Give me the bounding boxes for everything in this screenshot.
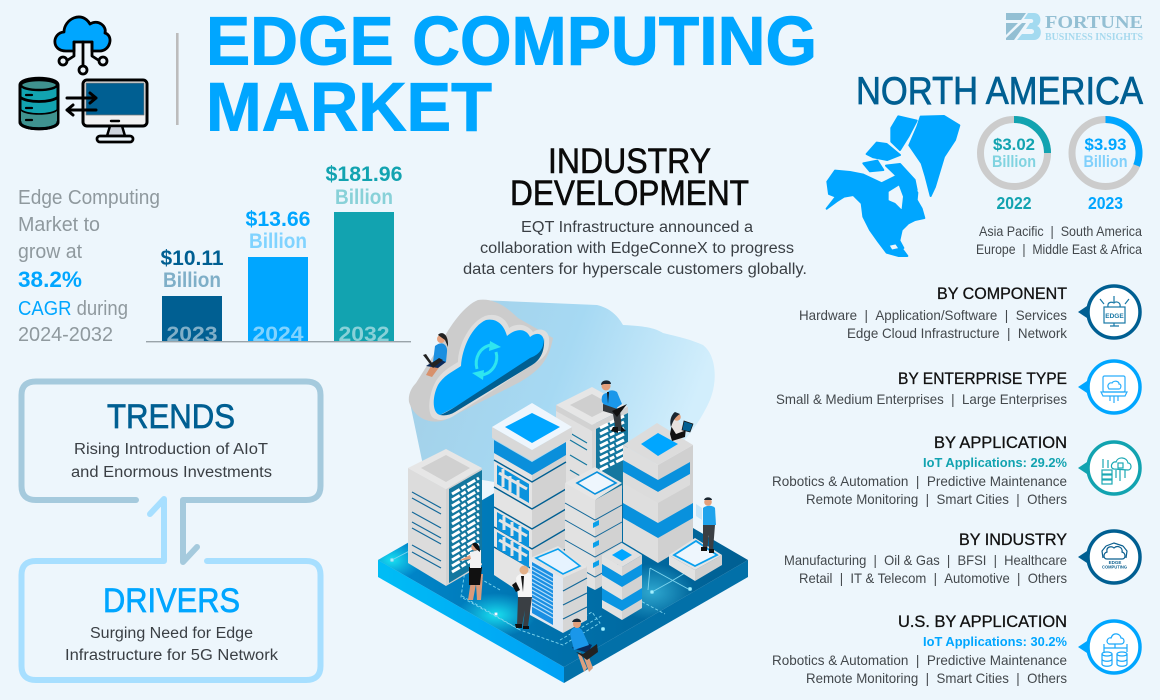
- donut: 2022: 2022: [996, 193, 1032, 213]
- icon: cloud laptop: [1078, 361, 1140, 413]
- bar chart: [146, 163, 411, 346]
- person: man with tablet: [696, 497, 716, 553]
- segment: U.S. by application: Robotics & Automation | Predictive Maintenance: [772, 652, 1067, 668]
- CAGR text: 38.2%: [18, 267, 82, 292]
- bar: 2024: $13.66: [246, 208, 310, 231]
- light beam: [410, 300, 715, 500]
- icon: edge monitor: [1078, 286, 1140, 338]
- text: industry development body: data centers for hyperscale customers globally.: [463, 261, 807, 278]
- other regions: [976, 223, 1142, 257]
- illustration: isometric edge data center: [362, 300, 748, 683]
- bar: 2032: 2032: [338, 323, 390, 346]
- tower: right stacked server: [623, 423, 693, 563]
- text: industry development body: collaboration with EdgeConneX to progress: [480, 240, 794, 257]
- bar: 2024: [246, 208, 310, 346]
- panel: trends: and Enormous Investments: [71, 464, 272, 481]
- person: man with clipboard: [512, 566, 532, 629]
- icon: edge computing cloud: [1078, 531, 1140, 583]
- bar: 2023: 2023: [166, 323, 218, 346]
- icon: edge computing cloud: EDGE: [1109, 560, 1121, 565]
- tower: rear server: [556, 387, 628, 505]
- segment: by industry: Manufacturing | Oil & Gas | BFSI | Healthcare: [784, 552, 1067, 568]
- segment: by enterprise type: Small & Medium Enterprises | Large Enterprises: [776, 391, 1067, 407]
- tower: central server: [492, 403, 572, 600]
- person: woman on right server: [670, 412, 693, 441]
- segment: by component: Edge Cloud Infrastructure | Network: [847, 325, 1068, 341]
- panel: trends: [22, 382, 320, 562]
- heading: industry development: INDUSTRY: [548, 142, 711, 181]
- cloud: [409, 300, 553, 422]
- donut: 2023: Billion: [1084, 153, 1128, 171]
- segment: by application: IoT Applications: 29.2%: [923, 456, 1067, 470]
- text: industry development body: [463, 219, 807, 278]
- tower: front rack server: [530, 546, 587, 633]
- icon: edge computing cloud: COMPUTING: [1102, 564, 1127, 570]
- segment: by application: BY APPLICATION: [934, 434, 1067, 452]
- icon: edge monitor: EDGE: [1105, 313, 1124, 320]
- text: industry development body: EQT Infrastructure announced a: [521, 219, 753, 236]
- bar: 2032: [326, 163, 402, 346]
- icon: cloud databases: [1078, 621, 1140, 673]
- icon: cloud, database and monitor: [20, 17, 147, 142]
- CAGR text: Market to: [18, 214, 100, 236]
- CAGR text: grow at: [18, 241, 82, 263]
- bar: 2023: $10.11: [160, 247, 224, 270]
- CAGR text: Edge Computing: [18, 187, 160, 209]
- segment: by component: Hardware | Application/Software | Services: [799, 307, 1067, 323]
- donut: 2023: 2023: [1088, 193, 1123, 213]
- person: man on rear server: [601, 380, 627, 433]
- title: EDGE COMPUTING: [206, 2, 817, 80]
- segment: by application: Remote Monitoring | Smart Cities | Others: [806, 491, 1067, 507]
- segment: by enterprise type: [776, 361, 1140, 413]
- platform: [378, 488, 748, 683]
- person: woman with laptop: [570, 619, 598, 672]
- bar: 2024: 2024: [252, 323, 304, 346]
- donut: 2023: [1072, 119, 1139, 213]
- bar: 2023: [160, 247, 224, 346]
- panel: trends: Rising Introduction of AIoT: [74, 441, 269, 458]
- donut: 2022: Billion: [992, 153, 1036, 171]
- CAGR text: CAGR during: [18, 298, 128, 320]
- donut: 2022: $3.02: [993, 135, 1035, 154]
- divider: [176, 33, 179, 125]
- logo: Fortune Business Insights: FORTUNE: [1045, 12, 1143, 32]
- segment: U.S. by application: U.S. BY APPLICATION: [898, 613, 1067, 631]
- segment: by component: BY COMPONENT: [937, 285, 1067, 303]
- heading: industry development: DEVELOPMENT: [510, 174, 749, 213]
- map: North America: [827, 116, 959, 256]
- other regions: Europe | Middle East & Africa: [976, 241, 1142, 257]
- bar: 2023: Billion: [163, 269, 221, 292]
- segment: U.S. by application: Remote Monitoring | Smart Cities | Others: [806, 670, 1067, 686]
- segment: by industry: BY INDUSTRY: [959, 531, 1067, 549]
- tower: left server: [408, 449, 482, 586]
- segment: by industry: [784, 531, 1140, 586]
- pad: front right: [669, 538, 722, 581]
- panel: drivers: DRIVERS: [103, 582, 240, 620]
- tower: small stacked server: [602, 543, 642, 620]
- donut: 2022: [980, 120, 1048, 213]
- CAGR text: 2024-2032: [18, 324, 113, 346]
- logo: Fortune Business Insights: BUSINESS INSIGHTS: [1045, 32, 1143, 43]
- title: [206, 2, 817, 146]
- segment: by enterprise type: BY ENTERPRISE TYPE: [898, 370, 1067, 388]
- segment: by application: [772, 434, 1140, 507]
- bar: 2024: Billion: [249, 230, 307, 253]
- panel: trends: TRENDS: [107, 398, 235, 436]
- segment: by application: Robotics & Automation | Predictive Maintenance: [772, 473, 1067, 489]
- panel: drivers: Surging Need for Edge: [90, 625, 253, 642]
- bar: 2032: $181.96: [326, 163, 402, 186]
- bar: 2032: Billion: [335, 186, 393, 209]
- CAGR text: [18, 187, 160, 346]
- segment: by component: [799, 285, 1140, 341]
- donut: 2023: $3.93: [1084, 135, 1126, 154]
- segment: U.S. by application: IoT Applications: 30.2%: [923, 635, 1067, 649]
- logo: Fortune Business Insights: [1006, 12, 1143, 43]
- title: MARKET: [206, 68, 492, 146]
- icon: cloud chip: [1078, 442, 1140, 494]
- segment: by industry: Retail | IT & Telecom | Automotive | Others: [799, 570, 1067, 586]
- panel: drivers: Infrastructure for 5G Network: [65, 647, 278, 664]
- panel: drivers: [22, 499, 320, 680]
- person: woman at server: [458, 543, 483, 600]
- tower: rear low server: [565, 467, 622, 590]
- heading: industry development: [510, 142, 749, 213]
- segment: U.S. by application: [772, 613, 1140, 686]
- person: woman on cloud: [423, 333, 448, 377]
- other regions: Asia Pacific | South America: [979, 223, 1142, 239]
